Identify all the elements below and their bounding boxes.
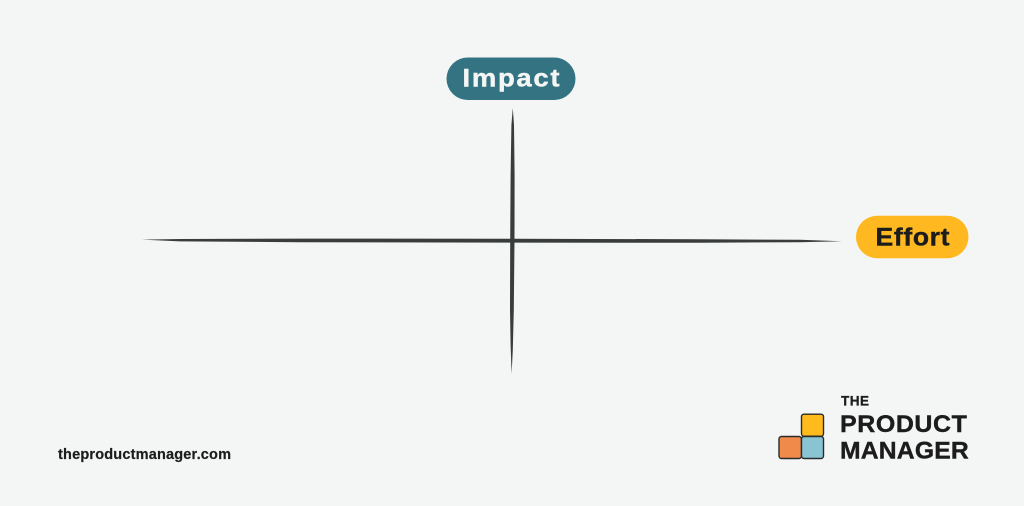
- logo wordmark: [840, 394, 969, 464]
- horizontal axis: effort: [142, 239, 842, 243]
- logo wordmark: MANAGER: [840, 438, 969, 464]
- vertical axis: impact: [510, 108, 515, 374]
- impact label pill: Impact: [462, 64, 560, 92]
- website url: theproductmanager.com: [58, 447, 231, 463]
- logo: the product manager: [779, 394, 969, 464]
- logo wordmark: THE: [841, 394, 869, 408]
- effort label pill: [856, 216, 968, 258]
- icon: logo blocks: [779, 414, 824, 458]
- logo wordmark: PRODUCT: [840, 411, 967, 438]
- impact label pill: [446, 58, 576, 100]
- effort label pill: Effort: [876, 224, 950, 251]
